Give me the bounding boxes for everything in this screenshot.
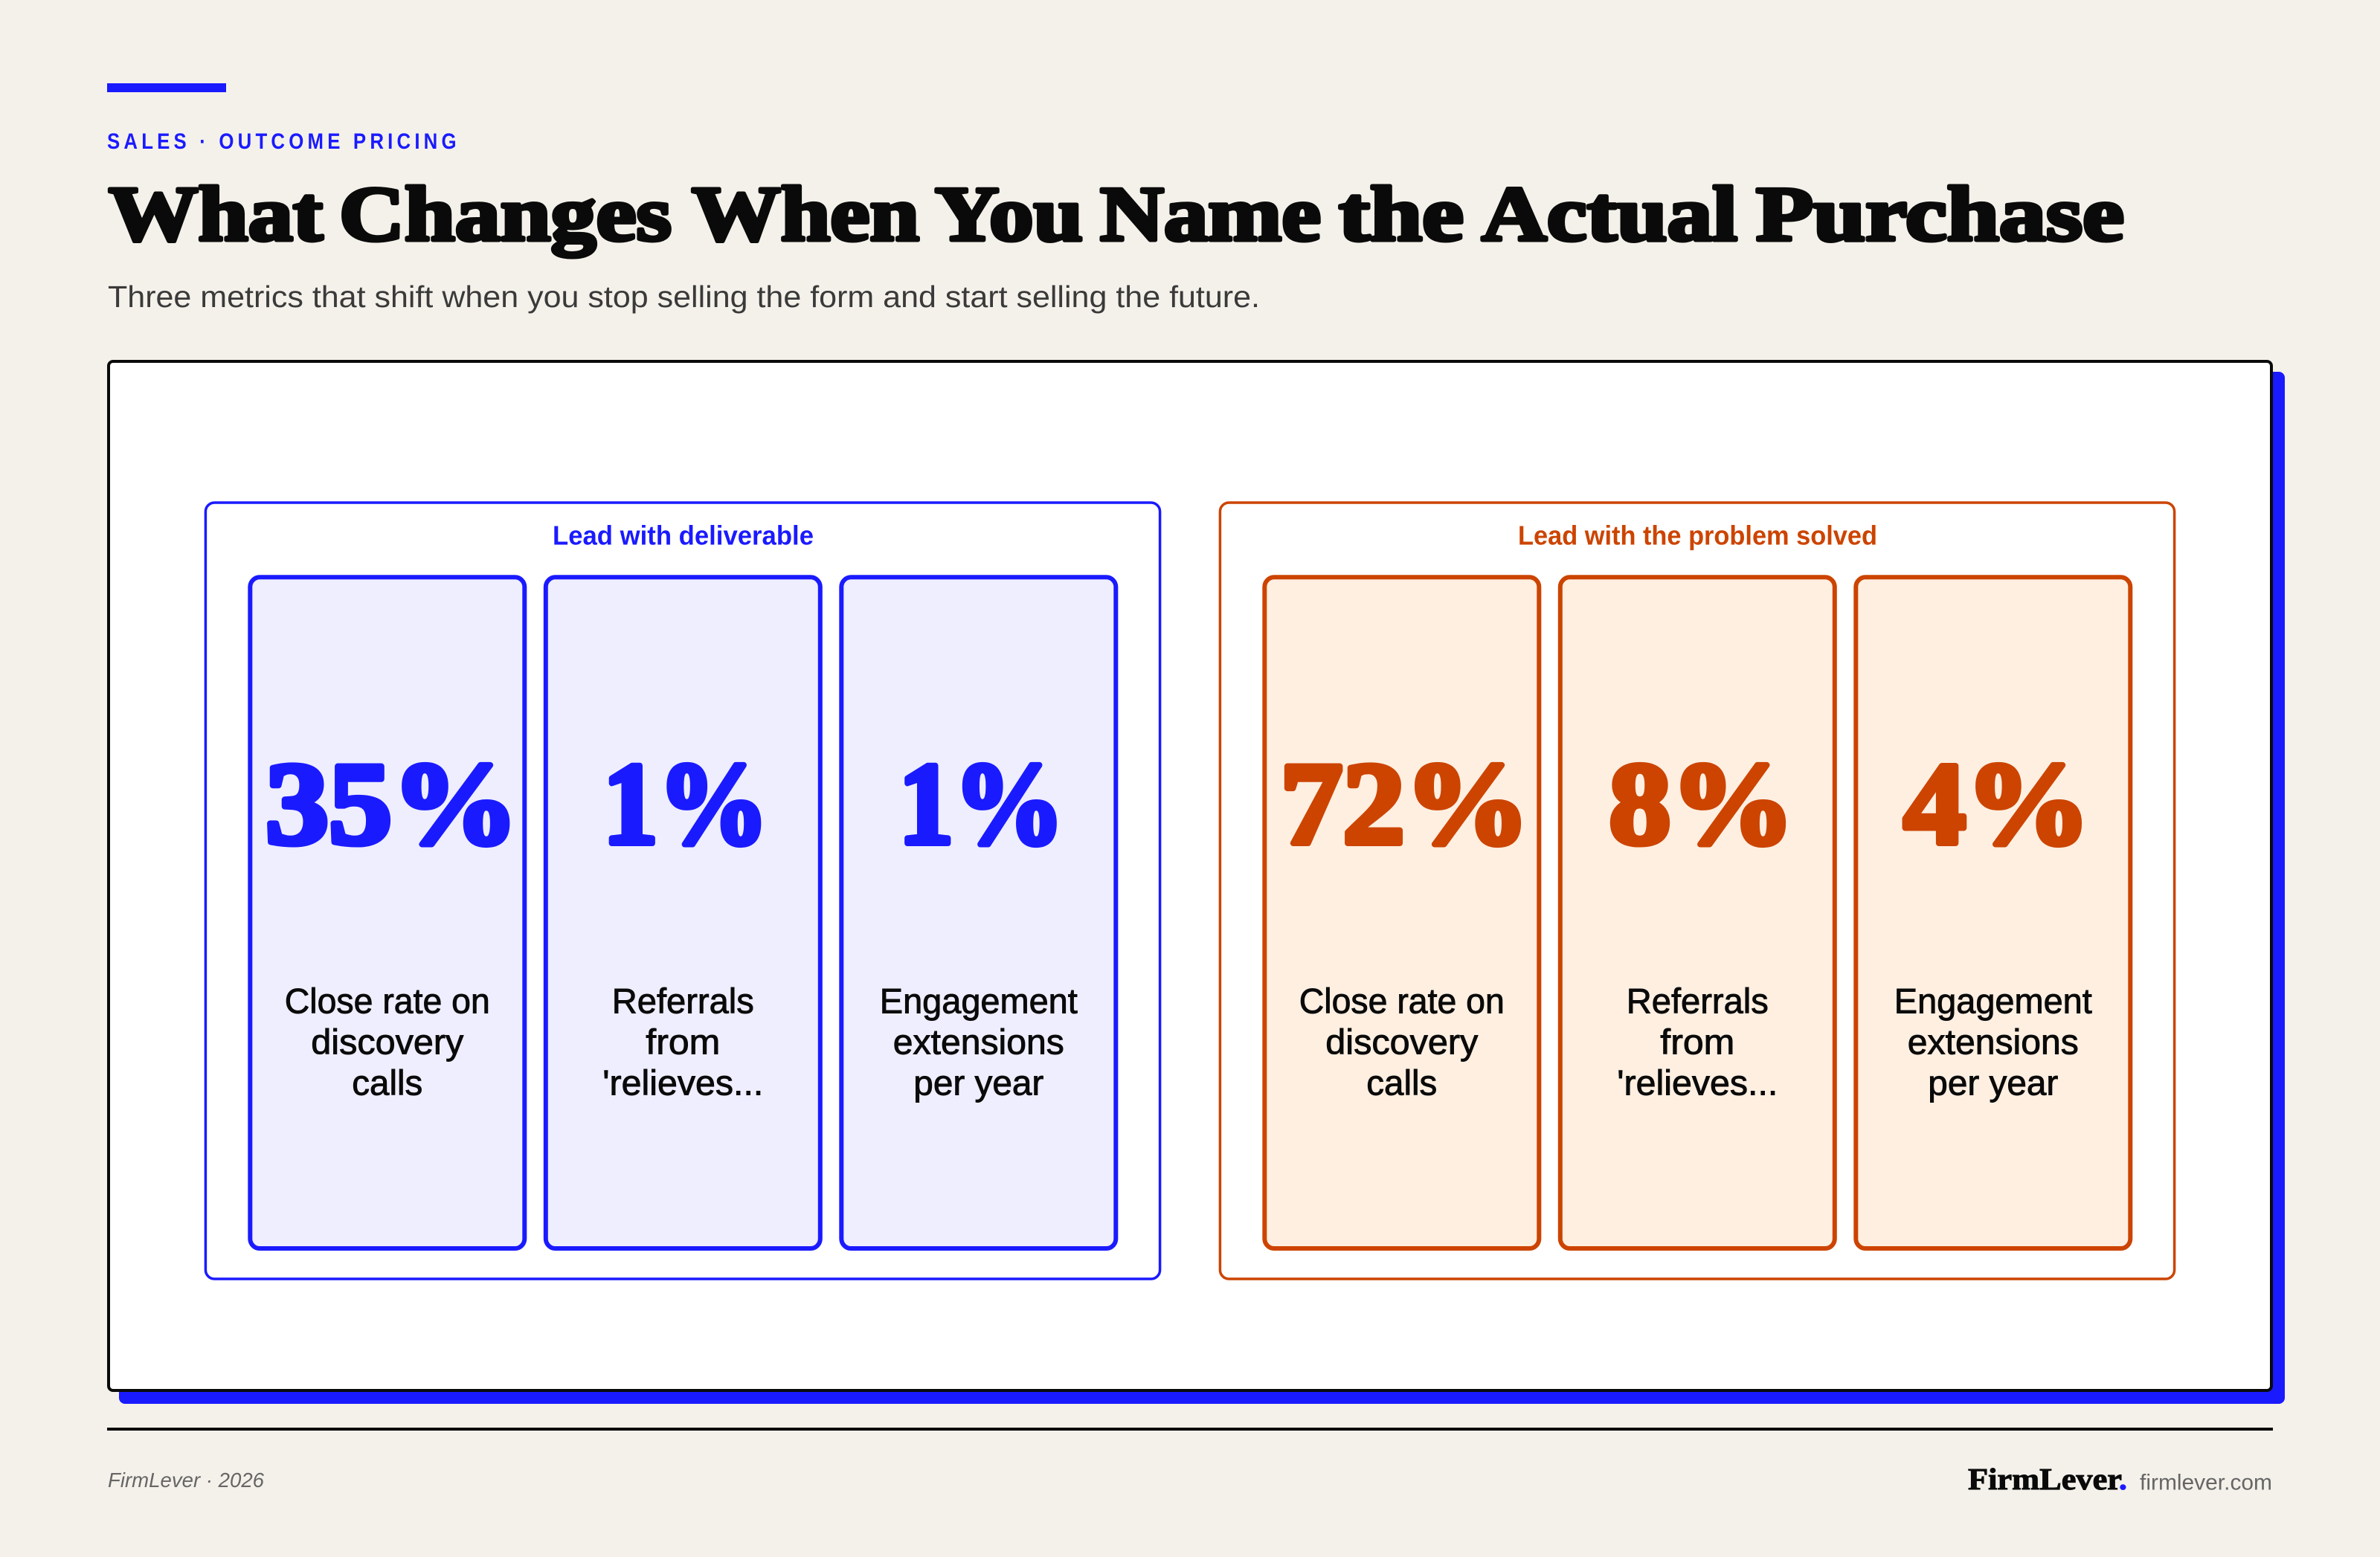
metric card: referrals, deliverable: [546, 577, 820, 1248]
title: Name: [1100, 170, 1321, 257]
label: extensions: Engagement: [1894, 981, 2092, 1021]
title: Actual: [1482, 170, 1737, 257]
metric card: close rate, deliverable: [250, 577, 524, 1248]
label: referrals: from: [1660, 1022, 1734, 1061]
label: referrals: from: [646, 1022, 720, 1061]
footer credit: FirmLever · 2026: [108, 1469, 264, 1492]
label: extensions: Engagement: [880, 981, 1078, 1021]
main card: [109, 361, 2271, 1390]
label: referrals: Referrals: [1627, 981, 1769, 1021]
value: 1%: 1%: [898, 739, 1064, 869]
value: 35%: 35%: [266, 739, 518, 869]
value: 1%: 1%: [602, 739, 769, 869]
panel heading: problem solved: Lead with the problem solved: [1518, 520, 1877, 551]
value: 4%: 4%: [1904, 739, 2090, 869]
title: When: [692, 170, 919, 257]
card offset shadow: [119, 372, 2285, 1404]
accent bar: [107, 83, 226, 92]
label: referrals: 'relieves...: [1617, 1063, 1778, 1102]
panel: lead with deliverable: [205, 503, 1160, 1279]
label: close rate: calls: [352, 1063, 422, 1102]
subtitle: Three metrics that shift when you stop selling the form and start selling the future.: [108, 280, 1260, 314]
label: referrals: Referrals: [612, 981, 754, 1021]
footer url: firmlever.com: [2140, 1471, 2272, 1495]
label: close rate: Close rate on: [1299, 981, 1505, 1021]
label: extensions: per year: [1928, 1063, 2058, 1102]
title: You: [935, 170, 1083, 257]
label: close rate: discovery: [311, 1022, 464, 1061]
panel heading: deliverable: Lead with deliverable: [553, 520, 814, 551]
title: Changes: [339, 170, 672, 257]
metric card: close rate, problem solved: [1264, 577, 1539, 1248]
value: 8%: 8%: [1609, 739, 1794, 869]
value: 72%: 72%: [1281, 739, 1529, 869]
metric card: referrals, problem solved: [1560, 577, 1835, 1248]
eyebrow: SALES · OUTCOME PRICING: [107, 129, 457, 153]
footer logo: FirmLever .: [1968, 1462, 2127, 1496]
label: close rate: Close rate on: [285, 981, 490, 1021]
title: What: [109, 170, 323, 257]
metric card: extensions, deliverable: [841, 577, 1116, 1248]
metric card: extensions, problem solved: [1856, 577, 2130, 1248]
panel: lead with the problem solved: [1220, 503, 2175, 1279]
title: the: [1339, 170, 1464, 257]
label: extensions: per year: [913, 1063, 1043, 1102]
label: referrals: 'relieves...: [602, 1063, 763, 1102]
label: extensions: extensions: [893, 1022, 1064, 1061]
label: extensions: extensions: [1908, 1022, 2079, 1061]
label: close rate: calls: [1366, 1063, 1437, 1102]
label: close rate: discovery: [1325, 1022, 1479, 1061]
title: Purchase: [1756, 170, 2124, 257]
